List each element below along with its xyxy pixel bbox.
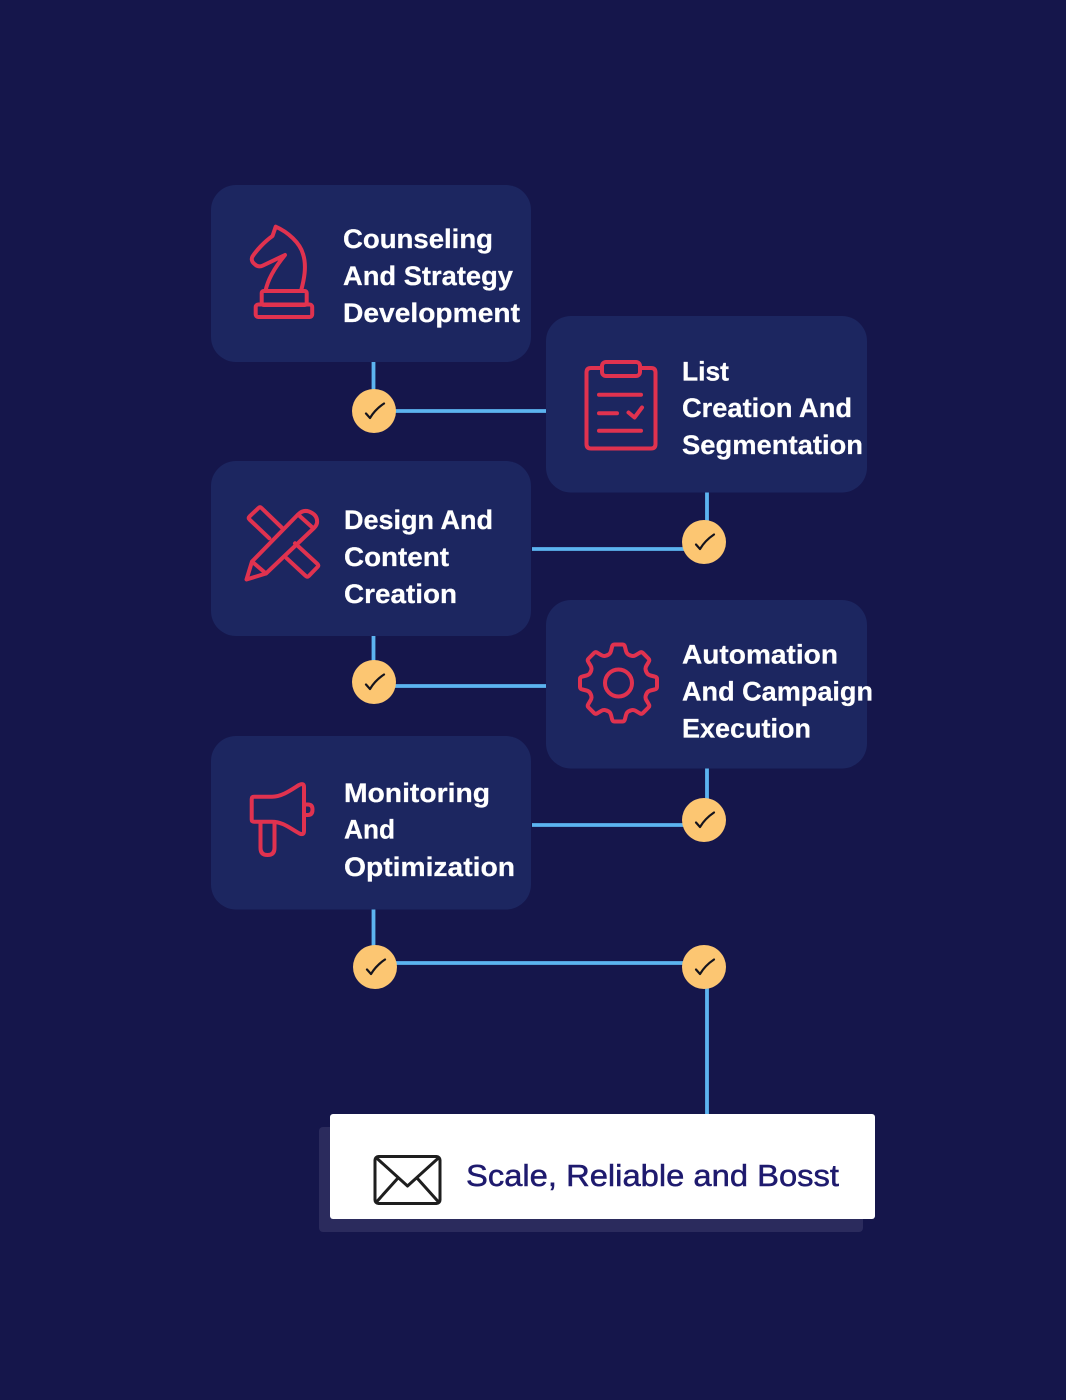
text: design and content creation: Content	[344, 542, 449, 572]
text: result label: Scale, Reliable and Bosst	[466, 1158, 839, 1193]
text: counseling and strategy development: And Strategy	[343, 261, 513, 291]
text: counseling and strategy development: Development	[343, 298, 520, 328]
panel: automation and campaign execution	[546, 600, 881, 768]
icon: clipboard checklist	[586, 362, 656, 448]
text: list creation and segmentation: Creation And	[682, 393, 852, 423]
text: automation and campaign execution: Execution	[682, 714, 811, 744]
check marker: after design	[352, 660, 396, 704]
text: counseling and strategy development: Counseling	[343, 224, 493, 254]
icon: megaphone	[252, 784, 312, 855]
text: list creation and segmentation: Segmentation	[682, 430, 863, 460]
icon: envelope	[375, 1156, 440, 1204]
panel: counseling and strategy development	[211, 185, 531, 362]
icon: chess knight	[252, 227, 312, 317]
panel: list creation and segmentation	[546, 316, 867, 492]
text: monitoring and optimization: Optimization	[344, 852, 515, 882]
check marker: after monitoring	[353, 945, 397, 989]
text: design and content creation: Design And	[344, 505, 493, 535]
check marker: after counseling	[352, 389, 396, 433]
panel: monitoring and optimization	[211, 736, 531, 910]
icon: gear	[580, 644, 657, 722]
text: automation and campaign execution: And Campaign	[682, 676, 873, 706]
text: automation and campaign execution: Automation	[682, 640, 838, 670]
result card: scale, reliable and boost	[319, 1114, 875, 1232]
text: design and content creation: Creation	[344, 579, 457, 609]
text: list creation and segmentation: List	[682, 356, 729, 386]
check marker: after list creation	[682, 520, 726, 564]
icon: pencil and ruler	[246, 507, 318, 580]
connector lines	[374, 362, 707, 1114]
check marker: final junction	[682, 945, 726, 989]
panel: design and content creation	[211, 461, 531, 636]
check marker: after automation	[682, 798, 726, 842]
text: monitoring and optimization: And	[344, 814, 395, 844]
text: monitoring and optimization: Monitoring	[344, 778, 490, 808]
